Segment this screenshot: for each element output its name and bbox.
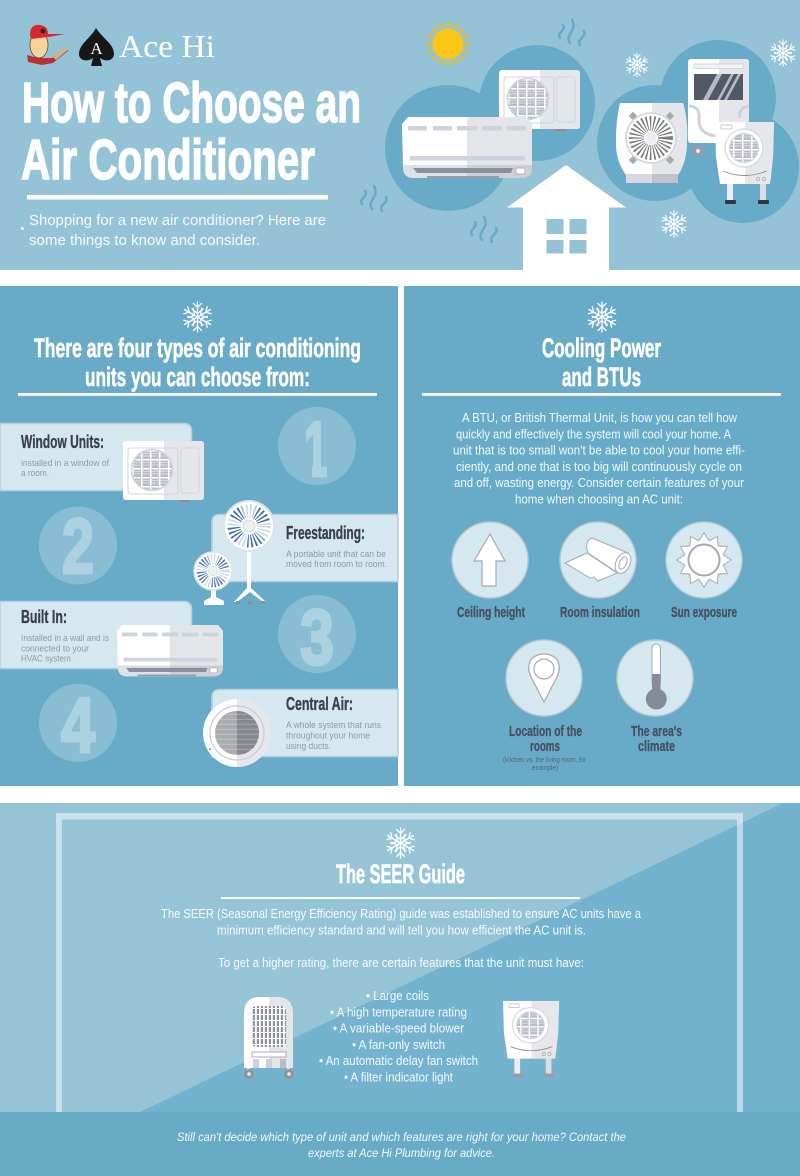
- window unit illustration: [123, 441, 204, 502]
- card: freestanding: [212, 514, 398, 582]
- SEER explanation text: [161, 907, 641, 970]
- cooler on legs: [715, 122, 774, 204]
- logo spade: [79, 28, 114, 66]
- feature: room insulation: Room insulation: [560, 604, 640, 621]
- number 3: [278, 593, 356, 681]
- SEER explanation text: The SEER (Seasonal Energy Efficiency Rating) guide was established to ensure AC units have a: [161, 907, 641, 921]
- panel: SEER guide: [0, 803, 800, 1112]
- heading: [34, 333, 361, 392]
- feature list: • Large coils: [366, 989, 429, 1003]
- number 1: 1: [304, 405, 328, 493]
- feature: location of the rooms: [503, 640, 587, 772]
- number 4: [39, 681, 117, 769]
- outdoor AC unit: [499, 70, 580, 131]
- card: window units: Window Units:: [21, 432, 104, 452]
- heading rule: [422, 393, 781, 396]
- card: freestanding: Freestanding:: [286, 523, 365, 543]
- feature list: • A high temperature rating: [330, 1006, 467, 1020]
- feature: ceiling height: [452, 522, 528, 621]
- title: Air Conditioner: [21, 128, 315, 192]
- heading: The SEER Guide: [336, 859, 465, 889]
- heading: units you can choose from:: [85, 362, 310, 392]
- card: built in: HVAC system.: [21, 654, 73, 664]
- feature list: • A variable-speed blower: [333, 1022, 464, 1036]
- feature list: • A fan-only switch: [352, 1038, 445, 1052]
- icon: snowflake: [385, 828, 416, 858]
- card: built in: Installed in a wall and is: [21, 633, 109, 644]
- icon: snowflakes: [625, 40, 797, 237]
- intro text: Shopping for a new air conditioner? Here are: [29, 212, 326, 229]
- icon: snowflake: [182, 302, 213, 332]
- feature: sun exposure: Sun exposure: [671, 604, 737, 621]
- card: central air: throughout your home: [286, 730, 370, 742]
- tower cooler illustration: [244, 997, 294, 1079]
- BTU explanation text: home when choosing an AC unit:: [515, 492, 683, 506]
- number 4: 4: [61, 681, 95, 769]
- title: How to Choose an: [22, 71, 361, 135]
- BTU explanation text: ciently, and one that is too big will continuously cycle on: [456, 460, 742, 474]
- number 1: [278, 407, 356, 485]
- footer text: Still can't decide which type of unit and which features are right for your home? Contact the: [177, 1130, 626, 1144]
- logo wordmark: Ace Hi: [119, 28, 215, 64]
- house: [507, 165, 626, 270]
- BTU explanation text: quickly and effectively the system will cool your home. A: [456, 428, 732, 442]
- title rule: [27, 195, 328, 200]
- heading: Cooling Power: [542, 333, 661, 363]
- icon: snowflake: [586, 302, 618, 332]
- BTU explanation text: unit that is too small won't be able to cool your home effi-: [453, 444, 745, 458]
- panel: air conditioner types: [0, 286, 398, 786]
- panel: cooling power and BTUs: [404, 286, 800, 786]
- feature: ceiling height: Ceiling height: [457, 604, 525, 621]
- logo mascot: [27, 25, 69, 65]
- logo spade: A: [90, 39, 103, 58]
- heading: [542, 333, 661, 392]
- feature list: • A filter indicator light: [344, 1070, 453, 1084]
- card: freestanding: A portable unit that can be: [286, 549, 386, 560]
- built in unit illustration: [117, 625, 223, 676]
- SEER explanation text: minimum efficiency standard and will tell you how efficient the AC unit is.: [217, 924, 586, 938]
- BTU explanation text: [453, 411, 745, 506]
- freestanding fans: [194, 501, 274, 605]
- feature: sun exposure: [666, 522, 742, 621]
- heading: There are four types of air conditioning: [34, 333, 361, 363]
- indoor split AC unit: [402, 117, 532, 178]
- logo: Ace Hi: [27, 25, 215, 66]
- footer text: experts at Ace Hi Plumbing for advice.: [308, 1146, 495, 1160]
- card: central air: using ducts.: [286, 741, 331, 752]
- card: window units: a room.: [21, 468, 49, 479]
- card: central air: [212, 690, 398, 756]
- heading: and BTUs: [562, 362, 641, 392]
- icon: heat wisps: [361, 20, 585, 242]
- header background: [0, 0, 800, 270]
- heading rule: [18, 393, 377, 396]
- number 3: 3: [300, 593, 334, 681]
- feature: the area's climate: climate: [638, 738, 675, 755]
- card: central air: A whole system that runs: [286, 720, 381, 731]
- card: window units: installed in a window of: [21, 458, 109, 469]
- card: built in: Built In:: [21, 607, 67, 627]
- feature: location of the rooms: (kitchen vs. the living room, for: [503, 757, 587, 764]
- evaporative cooler illustration: [503, 1001, 559, 1077]
- card: central air: Central Air:: [286, 694, 353, 714]
- icon: sun: [415, 11, 481, 77]
- feature list: • An automatic delay fan switch: [319, 1054, 478, 1068]
- feature: location of the rooms: example): [532, 765, 558, 772]
- intro text: [21, 212, 326, 249]
- feature list: [319, 989, 478, 1084]
- SEER explanation text: To get a higher rating, there are certain features that the unit must have:: [218, 956, 584, 970]
- card: freestanding: moved from room to room.: [286, 559, 387, 570]
- frame: [56, 813, 743, 1112]
- BTU explanation text: and off, wasting energy. Consider certain features of your: [454, 476, 744, 490]
- card: built in: [0, 602, 192, 668]
- feature: the area's climate: The area's: [631, 723, 682, 740]
- central air vent: [203, 699, 271, 767]
- tall portable unit: [688, 59, 749, 156]
- feature: location of the rooms: Location of the: [509, 723, 582, 740]
- box fan: [616, 103, 687, 183]
- number 2: 2: [62, 502, 94, 590]
- card: built in: connected to your: [21, 644, 89, 654]
- number 2: [39, 502, 117, 590]
- footer band: [0, 1112, 800, 1176]
- feature: the area's climate: [617, 640, 693, 755]
- heading rule: [221, 897, 580, 899]
- background blobs: [385, 40, 799, 223]
- card: window units: [0, 424, 192, 490]
- intro text: some things to know and consider.: [29, 232, 260, 249]
- footer text: [177, 1130, 626, 1160]
- feature: location of the rooms: rooms: [530, 738, 560, 755]
- diagonal background: [140, 803, 800, 1112]
- title: [21, 71, 361, 192]
- feature: room insulation: [560, 522, 640, 621]
- header illustration: [361, 11, 799, 270]
- BTU explanation text: A BTU, or British Thermal Unit, is how you can tell how: [462, 411, 738, 425]
